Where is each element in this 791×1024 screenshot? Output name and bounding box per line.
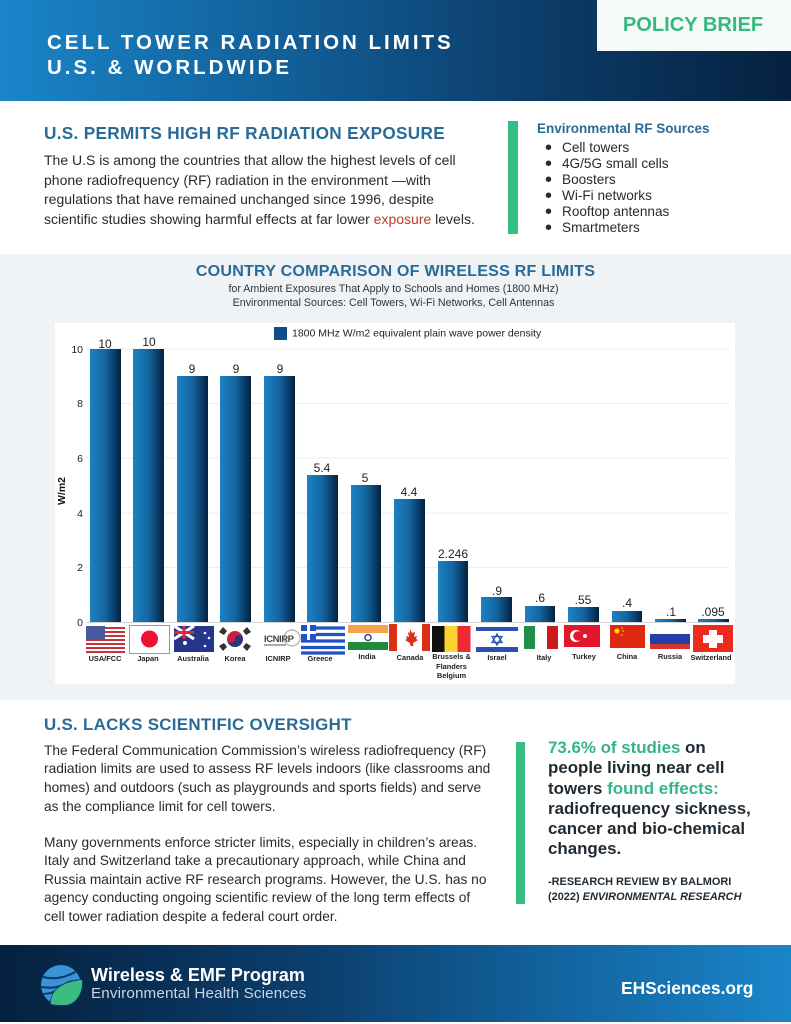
sources list: 4G/5G small cells [562, 156, 669, 171]
country labels: Australia [177, 654, 210, 663]
flag: USA [86, 626, 125, 653]
flag: India [348, 625, 388, 650]
footer banner [0, 945, 791, 1022]
citation: -RESEARCH REVIEW BY BALMORI [548, 876, 731, 888]
oversight text paragraph 2: Russia maintain active RF research programs. However, the U.S. has no [44, 872, 486, 887]
sources list [545, 137, 669, 239]
icon: globe and leaf logo [41, 965, 83, 1006]
bar value labels: 4.4 [401, 485, 418, 499]
flag: Turkey [564, 625, 600, 647]
flag: ICNIRP logo: ICNIRP [264, 634, 295, 645]
green divider bar [508, 121, 518, 234]
country labels: Belgium [437, 671, 467, 680]
title: U.S. & WORLDWIDE [47, 56, 292, 79]
green divider bar [516, 742, 525, 904]
flag: Greece [301, 625, 345, 654]
y axis labels: 4 [77, 508, 83, 520]
flag: Canada [389, 624, 430, 651]
bar value labels: 9 [233, 362, 240, 376]
sources list: • [545, 169, 552, 191]
title [47, 31, 454, 79]
flag: China [610, 625, 645, 648]
y axis labels [71, 344, 83, 629]
oversight text paragraph 1: radiation limits are used to assess RF levels indoors (like classrooms and [44, 761, 490, 776]
country labels: Russia [658, 652, 683, 661]
callout: 73.6% of studies: people living near cell [548, 758, 724, 777]
chart subheading: for Ambient Exposures That Apply to Schools and Homes (1800 MHz) [228, 283, 559, 295]
bar value labels: .095 [701, 605, 725, 619]
country labels: Turkey [572, 652, 597, 661]
oversight text paragraph 2: agency conducting ongoing scientific review of the long term effects of [44, 890, 470, 905]
heading: U.S. lacks scientific oversight: U.S. LACKS SCIENTIFIC OVERSIGHT [44, 715, 352, 734]
title: CELL TOWER RADIATION LIMITS [47, 31, 454, 54]
flag: Israel [476, 627, 518, 653]
sources heading: Environmental RF Sources [537, 121, 710, 136]
country labels: China [617, 652, 638, 661]
callout: 73.6% of studies: changes. [548, 839, 621, 858]
country labels: India [358, 652, 377, 661]
oversight text paragraph 1 [44, 742, 490, 814]
flag: Japan [130, 626, 170, 654]
country labels: Korea [225, 654, 246, 663]
bar value labels: 5.4 [314, 461, 331, 475]
heading: U.S. permits high RF radiation exposure: U.S. PERMITS HIGH RF RADIATION EXPOSURE [44, 123, 445, 143]
oversight text paragraph 2: cell tower radiation despite a federal court order. [44, 909, 338, 924]
bar value labels: 5 [362, 471, 369, 485]
country labels: Canada [397, 653, 424, 662]
sources list: Rooftop antennas [562, 204, 669, 219]
bar value labels: 9 [189, 362, 196, 376]
flag: Switzerland [693, 625, 733, 652]
citation [548, 876, 742, 903]
sources list: • [545, 201, 552, 223]
intro text: The U.S is among the countries that allow the highest levels of cell [44, 152, 456, 168]
sources list: • [545, 153, 552, 175]
header banner [0, 0, 791, 101]
callout: 73.6% of studies: towers found effects: [548, 779, 719, 798]
intro text [44, 152, 475, 227]
country labels: Israel [487, 653, 507, 662]
callout: 73.6% of studies: radiofrequency sickness, [548, 799, 751, 818]
y axis title: W/m2 [56, 477, 68, 505]
country labels: Japan [137, 654, 159, 663]
flag: Belgium [432, 626, 470, 652]
panel: country comparison [0, 254, 791, 700]
country labels: Flanders [436, 662, 467, 671]
sources list: Smartmeters [562, 220, 640, 235]
sources list: Cell towers [562, 140, 629, 155]
policy brief tag [597, 0, 791, 51]
sources list: • [545, 185, 552, 207]
policy brief tag: POLICY BRIEF [623, 14, 763, 36]
flag: Australia [174, 626, 214, 652]
bar value labels: .55 [575, 593, 592, 607]
country labels: Switzerland [690, 653, 732, 662]
bar value labels: 10 [98, 337, 112, 351]
bar value labels: .1 [666, 605, 676, 619]
chart subheading: Environmental Sources: Cell Towers, Wi-Fi Networks, Cell Antennas [233, 297, 554, 309]
sources list: • [545, 217, 552, 239]
oversight text paragraph 1: The Federal Communication Commission’s wireless radiofrequency (RF) [44, 742, 486, 758]
country labels: Greece [307, 654, 333, 663]
bar value labels: 10 [142, 335, 156, 349]
intro text: phone radiofrequency (RF) radiation in the environment —with [44, 172, 431, 188]
flag: Korea [219, 627, 251, 651]
callout: 73.6% of studies: cancer and bio-chemical [548, 819, 745, 838]
sources list: Wi-Fi networks [562, 188, 652, 203]
bar value labels: .9 [492, 584, 502, 598]
oversight text paragraph 2 [44, 834, 486, 924]
y axis labels: 10 [71, 344, 83, 356]
y axis labels: 6 [77, 453, 83, 465]
bar value labels: .4 [622, 596, 632, 610]
intro text: regulations that have remained unchanged since 1996, despite [44, 191, 434, 207]
website: EHSciences.org [621, 978, 753, 998]
callout: 73.6% of studies: 73.6% of studies on [548, 738, 706, 757]
flag: Italy [524, 626, 558, 649]
bar value labels: 9 [277, 362, 284, 376]
country labels [89, 652, 732, 680]
citation: (2022) ENVIRONMENTAL RESEARCH [548, 891, 741, 903]
bar value labels: .6 [535, 591, 545, 605]
sources list: • [545, 137, 552, 159]
legend: 1800 MHz W/m2 equivalent plain wave power density [292, 328, 542, 340]
intro text: scientific studies showing harmful effects at far lower exposure levels. [44, 211, 475, 227]
bar value labels: 2.246 [438, 547, 468, 561]
oversight text paragraph 2: Italy and Switzerland take a precautionary approach, while China and [44, 853, 466, 868]
y axis labels: 0 [77, 617, 83, 629]
country labels: Italy [537, 653, 552, 662]
chart subheading [228, 283, 559, 309]
country labels: USA/FCC [89, 654, 122, 663]
oversight text paragraph 1: homes) and outdoors (such as playgrounds and sports fields) and serve [44, 780, 481, 795]
bars [90, 349, 729, 622]
callout: 73.6% of studies [548, 738, 751, 858]
panel: environmental RF sources [537, 121, 710, 239]
organization name: Environmental Health Sciences [91, 985, 306, 1002]
y axis labels: 2 [77, 562, 83, 574]
oversight text paragraph 2: Many governments enforce stricter limits, especially in children’s areas. [44, 834, 477, 850]
flag: Russia [650, 634, 690, 649]
y axis labels: 8 [77, 398, 83, 410]
sources list: Boosters [562, 172, 616, 187]
oversight text paragraph 1: as the compliance limit for cell towers. [44, 799, 276, 814]
country labels: ICNIRP [265, 654, 291, 663]
flag: ICNIRP logo [264, 630, 300, 646]
chart heading: COUNTRY COMPARISON OF WIRELESS RF LIMITS [196, 262, 595, 280]
bar chart [55, 323, 735, 684]
country labels: Brussels & [432, 652, 471, 661]
program name: Wireless & EMF Program [91, 965, 305, 985]
bar value labels [98, 335, 725, 619]
